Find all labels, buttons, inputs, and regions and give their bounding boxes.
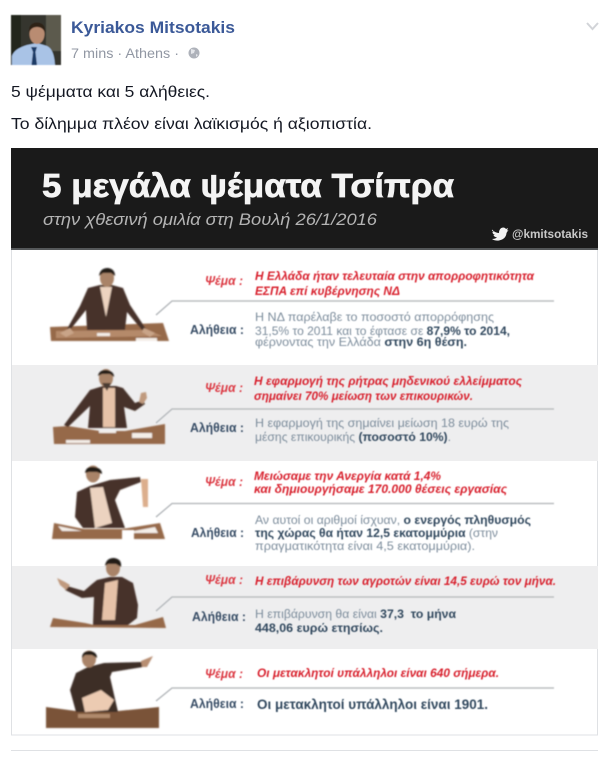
infographic frame	[12, 248, 598, 735]
timestamp and location: 7 mins · Athens ·	[71, 46, 179, 61]
row 5: lie and truth	[46, 650, 554, 728]
callout divider	[156, 597, 554, 611]
truth text: Η επιβάρυνση θα είναι 37,3 το μήνα	[255, 607, 457, 621]
truth text: Αν αυτοί οι αριθμοί ίσχυαν, ο ενεργός πληθυσμός	[255, 513, 531, 527]
gray band row 2	[12, 365, 598, 461]
truth text: 448,06 ευρώ ετησίως.	[255, 621, 383, 635]
lie text: Η επιβάρυνση των αγροτών είναι 14,5 ευρώ τον μήνα.	[255, 574, 556, 588]
truth text	[255, 416, 509, 444]
truth label: Αλήθεια :	[190, 421, 244, 435]
row 3: lie and truth	[52, 466, 554, 553]
icon: twitter bird	[492, 228, 508, 241]
truth text: Η ΝΔ παρέλαβε το ποσοστό απορρόφησης	[255, 310, 494, 324]
lie label: Ψέμα :	[205, 667, 243, 681]
truth text: Η εφαρμογή της σημαίνει μείωση 18 ευρώ της	[255, 416, 509, 430]
twitter handle: @kmitsotakis	[512, 229, 588, 241]
lie label: Ψέμα :	[205, 381, 243, 395]
truth text: φέρνοντας την Ελλάδα στην 6η θέση.	[255, 335, 467, 349]
lie label: Ψέμα :	[205, 573, 243, 587]
callout divider	[156, 409, 554, 423]
truth text: Οι μετακλητοί υπάλληλοι είναι 1901.	[257, 696, 488, 712]
row 1: lie and truth	[50, 268, 554, 349]
infographic	[11, 148, 598, 735]
lie text: ΕΣΠΑ επί κυβέρνησης ΝΔ	[255, 284, 400, 298]
row 4: lie and truth	[50, 558, 556, 635]
figure: speaker at podium, arm outstretched	[50, 558, 166, 628]
truth label: Αλήθεια :	[192, 610, 246, 624]
avatar photo	[11, 15, 61, 65]
post header	[11, 15, 598, 65]
figure: speaker at podium, both hands on podium	[50, 268, 169, 341]
callout divider	[156, 301, 554, 315]
banner	[11, 148, 598, 250]
truth label: Αλήθεια :	[191, 526, 244, 540]
author name: Kyriakos Mitsotakis	[71, 19, 235, 37]
row 2: lie and truth	[53, 369, 554, 444]
lie label: Ψέμα :	[205, 274, 243, 288]
truth text: της χώρας θα ήταν 12,5 εκατομμύρια (στην	[255, 526, 498, 540]
lie text	[254, 469, 508, 496]
truth label: Αλήθεια :	[190, 323, 244, 337]
lie text	[255, 269, 535, 298]
lie text: σημαίνει 70% μείωση των επικουρικών.	[254, 389, 473, 403]
gray band row 4	[12, 566, 598, 649]
truth text	[255, 607, 457, 635]
truth text	[255, 310, 510, 349]
banner subtitle: στην χθεσινή ομιλία στη Βουλή 26/1/2016	[43, 211, 378, 229]
figure: speaker at podium, pointing	[46, 650, 159, 728]
icon: globe	[188, 48, 200, 58]
callout divider	[156, 688, 554, 701]
banner title: 5 μεγάλα ψέματα Τσίπρα	[42, 167, 454, 204]
lie text: Οι μετακλητοί υπάλληλοι είναι 640 σήμερα.	[257, 666, 499, 680]
lie text: Μειώσαμε την Ανεργία κατά 1,4%	[254, 469, 441, 483]
post message line 2: Το δίλημμα πλέον είναι λαϊκισμός ή αξιοπιστία.	[11, 116, 372, 133]
truth text: μέσης επικουρικής (ποσοστό 10%).	[255, 430, 451, 444]
lie text: και δημιουργήσαμε 170.000 θέσεις εργασίας	[254, 482, 508, 496]
lie text: Η Ελλάδα ήταν τελευταία στην απορροφητικότητα	[255, 269, 535, 283]
lie text	[254, 374, 523, 403]
truth label: Αλήθεια :	[190, 697, 244, 711]
figure: speaker at podium, hand raised	[53, 369, 165, 444]
lie text: Η εφαρμογή της ρήτρας μηδενικού ελλείμματος	[254, 374, 523, 388]
post message line 1: 5 ψέμματα και 5 αλήθειες.	[11, 84, 210, 101]
figure: speaker at podium, holding paper	[52, 466, 165, 539]
icon: menu chevron	[587, 23, 598, 29]
callout divider	[156, 504, 554, 517]
truth text	[255, 513, 531, 553]
lie label: Ψέμα :	[205, 475, 243, 489]
truth text: 31,5% το 2011 και το έφτασε σε 87,9% το 2014,	[255, 324, 510, 338]
truth text: πραγματικότητα είναι 4,5 εκατομμύρια).	[255, 539, 475, 553]
